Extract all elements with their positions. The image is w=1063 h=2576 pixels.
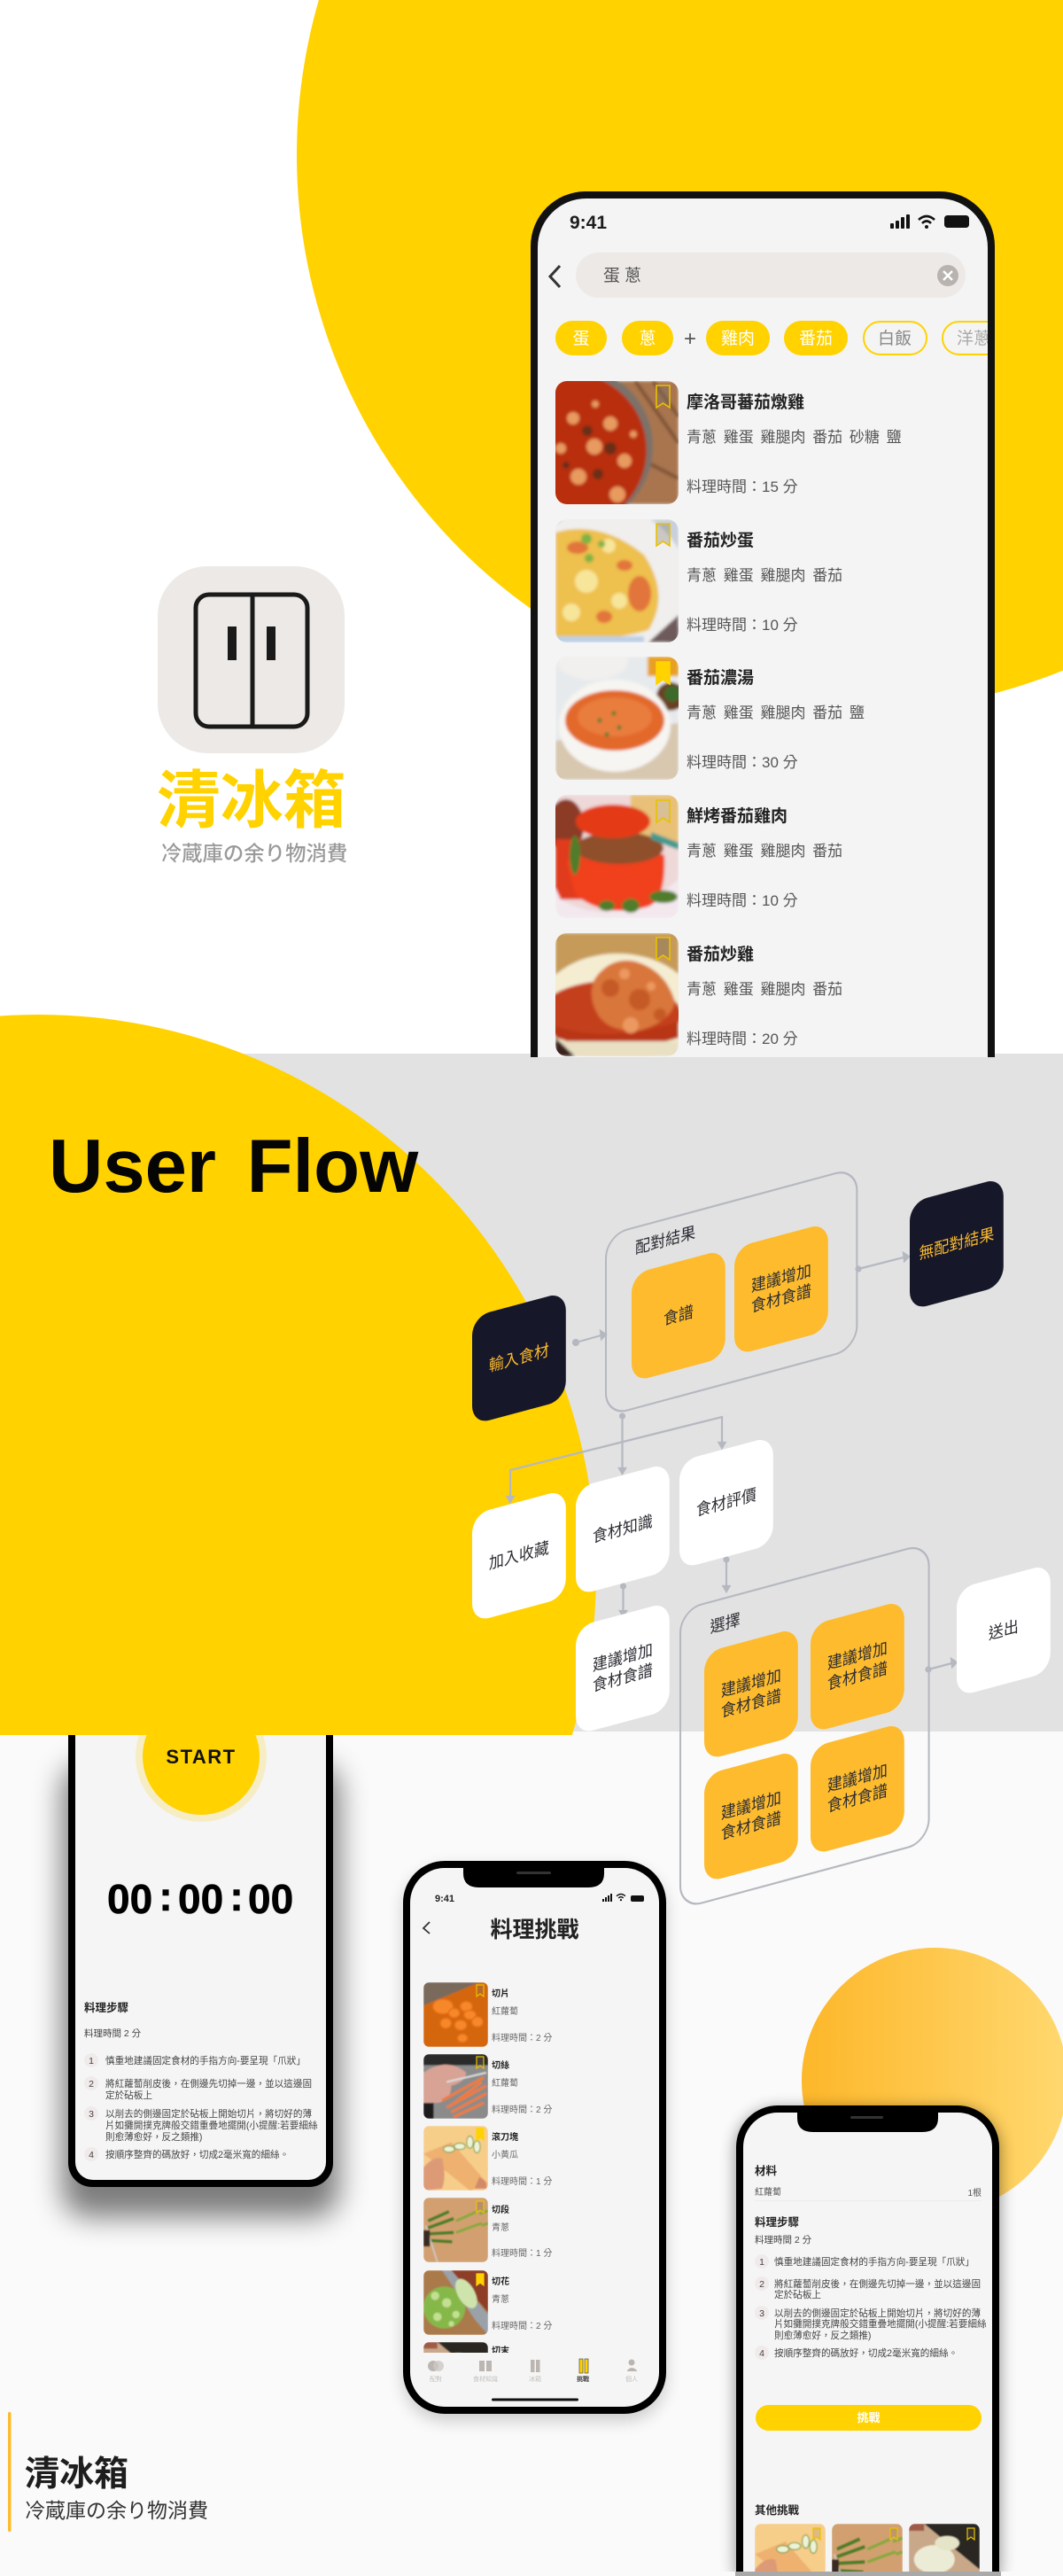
recipe 4 (548, 795, 842, 918)
node: choice B: 建議增加 (827, 1638, 888, 1673)
recipe 4: 青蔥 雞蛋 雞腿肉 番茄 (687, 843, 842, 860)
search field (576, 253, 966, 298)
status icons (890, 214, 969, 229)
ingredients: 材料 (755, 2164, 778, 2177)
cooking steps: 2 (759, 2279, 764, 2290)
node: suggested recipes: 建議增加 (751, 1261, 811, 1296)
recipe 3: 番茄濃湯 (687, 668, 754, 688)
cooking steps: 將紅蘿蔔削皮後，在側邊先切掉一邊，並以這邊固 (774, 2278, 981, 2290)
cooking steps: 料理步驟 (84, 2001, 129, 2014)
orange circle (802, 1948, 1063, 2214)
recipe 5 (555, 933, 842, 1056)
cooking steps: 按順序整齊的碼放好，切成2毫米寬的細絲。 (774, 2347, 958, 2359)
challenge: segments: 青蔥 (492, 2222, 509, 2233)
cooking steps: 片如攤開撲克牌般交錯重疊地擺開(小提醒:若要細絲 (105, 2120, 318, 2131)
heading: User Flow: User Flow (49, 1125, 419, 1209)
cooking steps: 3 (89, 2109, 94, 2120)
tab bar: 配對 (430, 2375, 442, 2383)
timer readout: 00 (178, 1876, 223, 1922)
cooking steps: 慎重地建議固定食材的手指方向-要呈現「爪狀」 (105, 2055, 306, 2066)
tab bar: 冰箱 (529, 2375, 541, 2383)
cooking steps: 慎重地建議固定食材的手指方向-要呈現「爪狀」 (774, 2256, 974, 2268)
cooking steps: 4 (759, 2348, 764, 2359)
status bar: 9:41 (435, 1894, 454, 1904)
cooking steps: 2 (89, 2079, 94, 2090)
ingredient chips: + (684, 327, 696, 351)
recipe 3: 青蔥 雞蛋 雞腿肉 番茄 鹽 (687, 704, 865, 721)
tab bar: 個人 (625, 2375, 638, 2383)
challenge button: 挑戰 (857, 2411, 881, 2424)
timer readout: : (159, 1873, 173, 1919)
cooking steps: 料理時間 2 分 (755, 2234, 812, 2245)
challenge: roll cut: 小黃瓜 (492, 2149, 518, 2160)
container: choose: 選擇 (710, 1610, 741, 1637)
recipe 1 (555, 381, 901, 504)
challenge button (756, 2405, 982, 2431)
recipe 5: 番茄炒雞 (687, 945, 754, 964)
tab bar: 食材知識 (473, 2375, 498, 2383)
node: ingredient knowledge: 食材知識 (593, 1512, 653, 1546)
phone: timer (62, 1684, 339, 2217)
recipe 5: 青蔥 雞蛋 雞腿肉 番茄 (687, 981, 842, 998)
node: choice B (811, 1599, 904, 1733)
timer readout: : (229, 1873, 244, 1919)
recipe 1: 料理時間：15 分 (687, 479, 798, 495)
cooking steps: 3 (759, 2308, 764, 2319)
node: add to favourites: 加入收藏 (489, 1538, 549, 1573)
challenge: roll cut (423, 2126, 552, 2191)
cooking steps: 以削去的側邊固定於砧板上開始切片，將切好的薄 (105, 2108, 312, 2120)
ingredients: 1根 (967, 2187, 982, 2199)
node: choice D (811, 1722, 904, 1856)
cooking steps: 片如攤開撲克牌般交錯重疊地擺開(小提醒:若要細絲 (774, 2318, 987, 2330)
challenge: shreds (423, 2054, 552, 2119)
cooking steps: 以削去的側邊固定於砧板上開始切片，將切好的薄 (774, 2308, 981, 2319)
node: choice A: 建議增加 (721, 1666, 781, 1700)
node: suggested recipes: 食材食譜 (751, 1281, 811, 1316)
lower section background (0, 1732, 1063, 2576)
challenge: flowers: 青蔥 (492, 2293, 509, 2305)
node: recipes: 食譜 (663, 1303, 694, 1328)
hero yellow circle (297, 0, 1063, 712)
recipe 1: 青蔥 雞蛋 雞腿肉 番茄 砂糖 鹽 (687, 429, 902, 446)
footer tagline: 冷蔵庫の余り物消費 (25, 2499, 208, 2522)
node: submit: 送出 (989, 1617, 1019, 1643)
left yellow circle (0, 1015, 596, 1735)
footer accent bar (8, 2412, 11, 2532)
node: suggested recipes white: 建議增加 (593, 1640, 653, 1675)
challenge: roll cut: 料理時間：1 分 (492, 2175, 552, 2187)
recipe 2: 料理時間：10 分 (687, 617, 798, 634)
cooking steps: 4 (89, 2150, 94, 2160)
user flow diagram (472, 1168, 1051, 1909)
phone: search results (531, 191, 995, 1057)
challenge: segments (423, 2198, 552, 2262)
ingredient chips: 雞肉 (721, 329, 755, 348)
node: suggested recipes white (576, 1601, 670, 1735)
start button: START (166, 1746, 237, 1768)
challenge: slices: 紅蘿蔔 (492, 2005, 518, 2017)
node: no match (910, 1177, 1004, 1311)
app name: 清冰箱 (157, 767, 346, 837)
timer readout (107, 1873, 293, 1922)
start button (136, 1691, 267, 1822)
challenge: shreds: 紅蘿蔔 (492, 2077, 518, 2089)
cooking steps (84, 2001, 318, 2161)
node: ingredient reviews (679, 1436, 773, 1569)
back chevron (550, 266, 560, 287)
node: choice B: 食材食譜 (827, 1659, 888, 1693)
node: submit (957, 1563, 1051, 1697)
search field: 蛋蔥 (603, 266, 646, 285)
challenge: flowers: 料理時間：2 分 (492, 2320, 552, 2331)
challenge: slices: 切片 (492, 1988, 509, 1999)
app icon: fridge (158, 566, 345, 753)
ingredient chips: 蛋 (572, 329, 590, 348)
cooking steps (755, 2215, 987, 2360)
node: choice C: 食材食譜 (721, 1809, 781, 1843)
tab bar (428, 2359, 638, 2383)
ingredient chips: 蔥 (639, 329, 656, 348)
back chevron (423, 1922, 430, 1934)
screen title: 料理挑戰 (490, 1918, 579, 1942)
cooking steps: 定於砧板上 (774, 2289, 821, 2300)
node: no match: 無配對結果 (919, 1225, 994, 1263)
recipe 2: 番茄炒蛋 (687, 531, 754, 550)
grey user flow band (0, 1054, 1063, 1732)
other challenges (755, 2503, 980, 2576)
phone: cooking challenge list (403, 1861, 666, 2421)
node: suggested recipes (734, 1222, 828, 1356)
cooking steps: 則愈薄愈好，反之類推) (774, 2330, 871, 2341)
footer title: 清冰箱 (25, 2455, 128, 2494)
ingredients: 紅蘿蔔 (755, 2186, 781, 2198)
challenge: segments: 切段 (492, 2204, 509, 2215)
recipe 4: 料理時間：10 分 (687, 892, 798, 909)
notch (463, 1864, 604, 1887)
recipe 3 (555, 657, 865, 780)
cooking steps: 1 (89, 2056, 94, 2066)
node: choice D: 建議增加 (827, 1761, 888, 1795)
ingredients (755, 2164, 982, 2201)
cooking steps: 1 (759, 2257, 764, 2268)
node: choice A (704, 1627, 798, 1761)
cooking steps: 則愈薄愈好，反之類推) (105, 2131, 202, 2143)
node: choice D: 食材食譜 (827, 1781, 888, 1816)
notch (797, 2113, 938, 2132)
node: input ingredients: 輸入食材 (489, 1341, 549, 1375)
tab bar: 挑戰 (577, 2375, 589, 2383)
challenge: segments: 料理時間：1 分 (492, 2247, 552, 2259)
recipe 5: 料理時間：20 分 (687, 1031, 798, 1047)
challenge: shreds: 料理時間：2 分 (492, 2104, 552, 2115)
node: recipes (632, 1249, 725, 1382)
challenge: roll cut: 滾刀塊 (492, 2131, 518, 2143)
node: ingredient knowledge (576, 1462, 670, 1596)
container: choose (680, 1543, 929, 1909)
ingredient chips: 白飯 (878, 329, 912, 348)
ingredient chips: 洋蔥 (957, 329, 990, 348)
cooking steps: 料理時間 2 分 (84, 2027, 142, 2039)
node: choice A: 食材食譜 (721, 1686, 781, 1721)
home indicator (492, 2398, 578, 2401)
phone: recipe detail (735, 2105, 1001, 2576)
node: suggested recipes white: 食材食譜 (593, 1661, 653, 1695)
recipe 3: 料理時間：30 分 (687, 754, 798, 771)
status time: 9:41 (570, 213, 607, 233)
challenge: mince: 切末 (492, 2345, 509, 2356)
recipe 2 (555, 519, 842, 642)
node: choice C: 建議增加 (721, 1788, 781, 1823)
cooking steps: 按順序整齊的碼放好，切成2毫米寬的細絲。 (105, 2149, 289, 2160)
cooking steps: 定於砧板上 (105, 2090, 152, 2101)
node: ingredient reviews: 食材評價 (696, 1485, 757, 1520)
challenge: flowers: 切花 (492, 2276, 509, 2287)
challenge: slices: 料理時間：2 分 (492, 2032, 552, 2043)
node: choice C (704, 1749, 798, 1883)
challenge: shreds: 切絲 (492, 2059, 509, 2071)
challenge: mince (423, 2342, 508, 2353)
recipe 4: 鮮烤番茄雞肉 (687, 806, 788, 826)
container: match results: 配對結果 (635, 1223, 695, 1257)
challenge: slices (423, 1982, 552, 2047)
timer readout: 00 (107, 1876, 152, 1922)
status bar (435, 1894, 644, 1904)
timer readout: 00 (248, 1876, 293, 1922)
container: match results (606, 1168, 857, 1416)
recipe 2: 青蔥 雞蛋 雞腿肉 番茄 (687, 567, 842, 584)
challenge: flowers (423, 2270, 552, 2335)
arrows and connectors (507, 1253, 957, 1671)
recipe 1: 摩洛哥蕃茄燉雞 (687, 392, 804, 412)
ingredient chips (555, 321, 1005, 355)
other challenges: 其他挑戰 (755, 2503, 800, 2517)
node: add to favourites (472, 1489, 566, 1623)
cooking steps: 料理步驟 (755, 2215, 800, 2229)
app tagline: 冷蔵庫の余り物消費 (161, 842, 347, 865)
cooking steps: 將紅蘿蔔削皮後，在側邊先切掉一邊，並以這邊固 (105, 2078, 312, 2090)
ingredient chips: 番茄 (799, 329, 833, 348)
node: input ingredients (472, 1291, 566, 1425)
